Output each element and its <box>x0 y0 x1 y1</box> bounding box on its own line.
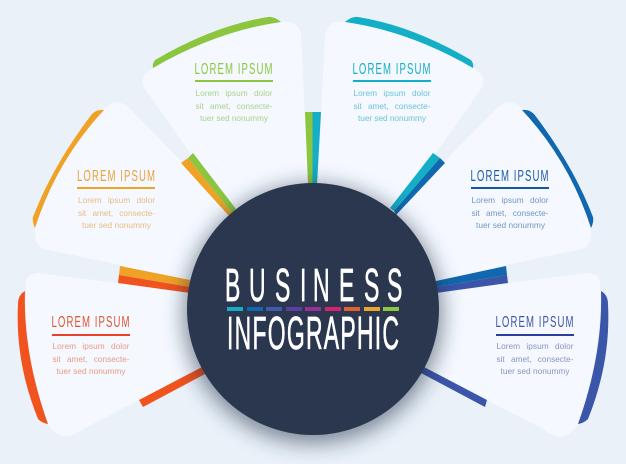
text block: teal <box>352 59 431 123</box>
text block: blue: LOREM IPSUM <box>496 312 573 331</box>
text block: teal: sit amet, consecte- <box>354 101 431 111</box>
text block: orange: tuer sed nonummy <box>82 220 152 230</box>
center circle <box>187 183 439 435</box>
text block: green: Lorem ipsum dolor <box>196 88 273 98</box>
text block: green: LOREM IPSUM <box>194 59 272 78</box>
panel: red <box>18 273 203 436</box>
text block: blue: sit amet, consecte- <box>496 354 574 364</box>
bar: green and teal <box>305 112 321 184</box>
panel: teal <box>318 17 483 213</box>
text block: teal: Lorem ipsum dolor <box>354 88 431 98</box>
bar: red <box>139 367 205 407</box>
text block: teal: LOREM IPSUM <box>352 59 430 78</box>
text block: dark blue: sit amet, consecte- <box>472 208 549 218</box>
connector bars <box>118 112 508 407</box>
green arc <box>153 17 281 68</box>
red arc <box>18 291 48 424</box>
text block: dark blue: LOREM IPSUM <box>470 166 548 185</box>
text block: dark blue: tuer sed nonummy <box>476 220 546 230</box>
text block: red: LOREM IPSUM <box>52 312 129 331</box>
text block: red <box>52 312 130 376</box>
bar: dark blue and blue <box>436 266 508 293</box>
text block: red: Lorem ipsum dolor <box>52 341 130 351</box>
text block: green: tuer sed nonummy <box>200 113 269 123</box>
text block: green: sit amet, consecte- <box>196 101 273 111</box>
blue arc <box>578 291 608 424</box>
text block: orange <box>77 166 155 230</box>
panel: dark blue <box>394 102 593 282</box>
color dashes <box>227 307 399 311</box>
teal arc <box>345 17 473 68</box>
title <box>225 259 402 359</box>
text block: orange: sit amet, consecte- <box>78 208 155 218</box>
circle shadow <box>183 184 443 444</box>
bar: orange and red <box>118 266 190 293</box>
text block: blue: Lorem ipsum dolor <box>496 341 574 351</box>
title line: INFOGRAPHIC: INFOGRAPHIC <box>227 307 399 359</box>
text block: teal: tuer sed nonummy <box>358 113 427 123</box>
title line: BUSINESS: BUSINESS <box>225 259 402 311</box>
orange arc <box>33 110 104 228</box>
text block: orange: Lorem ipsum dolor <box>78 195 155 205</box>
panel: green <box>143 17 308 213</box>
dark blue arc <box>522 110 593 228</box>
text block: dark blue <box>470 166 549 230</box>
text block: red: tuer sed nonummy <box>56 366 126 376</box>
bar: orange and green <box>181 153 236 216</box>
bar: blue <box>421 367 487 407</box>
text block: orange: LOREM IPSUM <box>77 166 155 185</box>
text block: dark blue: Lorem ipsum dolor <box>472 195 549 205</box>
panel: blue <box>423 273 608 436</box>
text block: red: sit amet, consecte- <box>52 354 130 364</box>
bar: teal and dark blue <box>390 153 445 215</box>
text block: green <box>194 59 273 123</box>
text block: blue: tuer sed nonummy <box>500 366 570 376</box>
text block: blue <box>496 312 574 376</box>
panel: orange <box>33 102 232 282</box>
